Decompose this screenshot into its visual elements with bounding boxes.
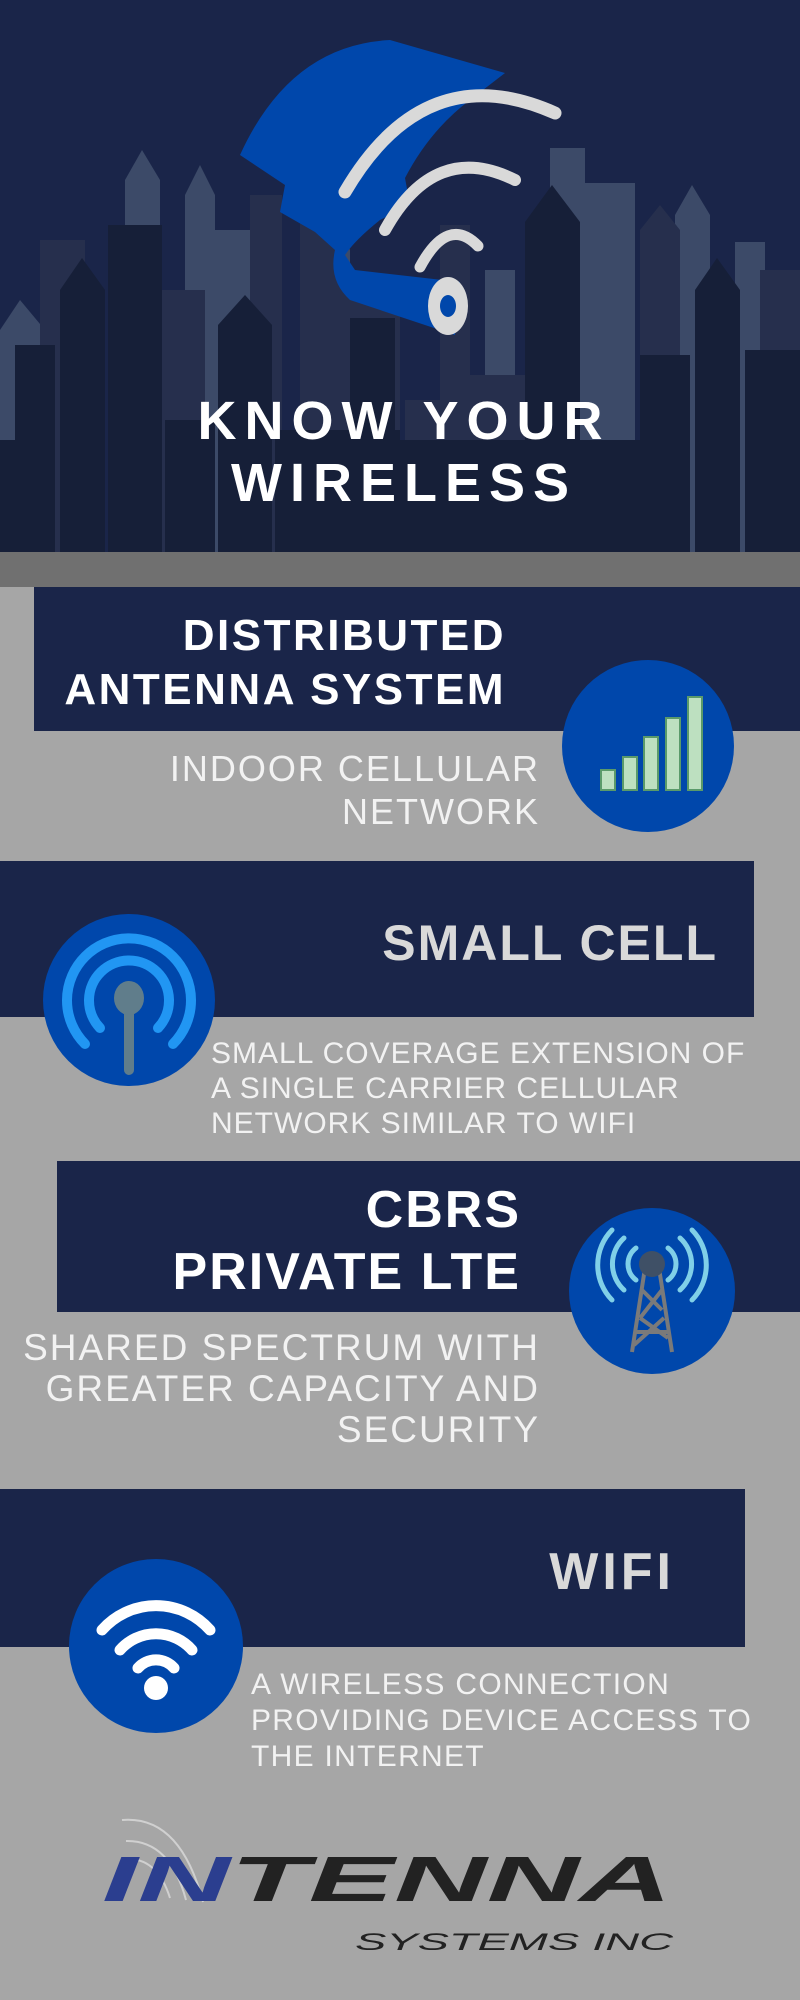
- panel: distributed antenna system: [34, 587, 800, 832]
- icon: antenna broadcast: [43, 914, 215, 1086]
- icon: 3D wifi logo: [240, 40, 562, 335]
- heading: small cell: SMALL CELL: [382, 915, 718, 971]
- description: wifi: A WIRELESS CONNECTION: [251, 1668, 670, 1701]
- banner: small cell: [0, 861, 754, 1017]
- description: small cell: [211, 1037, 745, 1140]
- logo: Intenna Systems Inc: SYSTEMS INC: [355, 1929, 674, 1956]
- description: small cell: NETWORK SIMILAR TO WIFI: [211, 1107, 636, 1140]
- heading: CBRS: CBRS: [366, 1181, 521, 1239]
- banner: wifi: [0, 1489, 745, 1647]
- panel: wifi: [0, 1489, 752, 1773]
- description: CBRS: SECURITY: [337, 1409, 540, 1450]
- title: KNOW YOUR: [197, 391, 610, 451]
- divider strip: [0, 552, 800, 587]
- heading: CBRS: PRIVATE LTE: [173, 1243, 521, 1301]
- heading: DAS: DISTRIBUTED: [183, 611, 506, 660]
- panel: small cell: [0, 861, 754, 1140]
- logo: Intenna Systems Inc: IN TENNA: [102, 1843, 672, 1915]
- logo: Intenna Systems Inc: [102, 1818, 674, 1956]
- description: small cell: SMALL COVERAGE EXTENSION OF: [211, 1037, 745, 1070]
- description: wifi: THE INTERNET: [251, 1740, 485, 1773]
- title: [197, 391, 610, 513]
- description: DAS: [170, 748, 540, 832]
- panel: CBRS private LTE: [23, 1161, 800, 1450]
- icon: wifi: [69, 1559, 243, 1733]
- banner: CBRS: [57, 1161, 800, 1312]
- banner: DAS: [34, 587, 800, 731]
- header: city skyline with wifi logo: [0, 0, 800, 552]
- heading: DAS: [64, 611, 506, 714]
- description: CBRS: [23, 1327, 540, 1450]
- description: wifi: [251, 1668, 752, 1773]
- description: CBRS: GREATER CAPACITY AND: [46, 1368, 540, 1409]
- icon: cell tower: [569, 1208, 735, 1374]
- heading: wifi: WIFI: [549, 1543, 675, 1601]
- description: small cell: A SINGLE CARRIER CELLULAR: [211, 1072, 679, 1105]
- description: wifi: PROVIDING DEVICE ACCESS TO: [251, 1704, 752, 1737]
- heading: CBRS: [173, 1181, 521, 1301]
- description: CBRS: SHARED SPECTRUM WITH: [23, 1327, 540, 1368]
- heading: DAS: ANTENNA SYSTEM: [64, 665, 506, 714]
- title: WIRELESS: [231, 453, 577, 513]
- icon: signal bars: [562, 660, 734, 832]
- description: DAS: NETWORK: [342, 791, 540, 832]
- description: DAS: INDOOR CELLULAR: [170, 748, 540, 789]
